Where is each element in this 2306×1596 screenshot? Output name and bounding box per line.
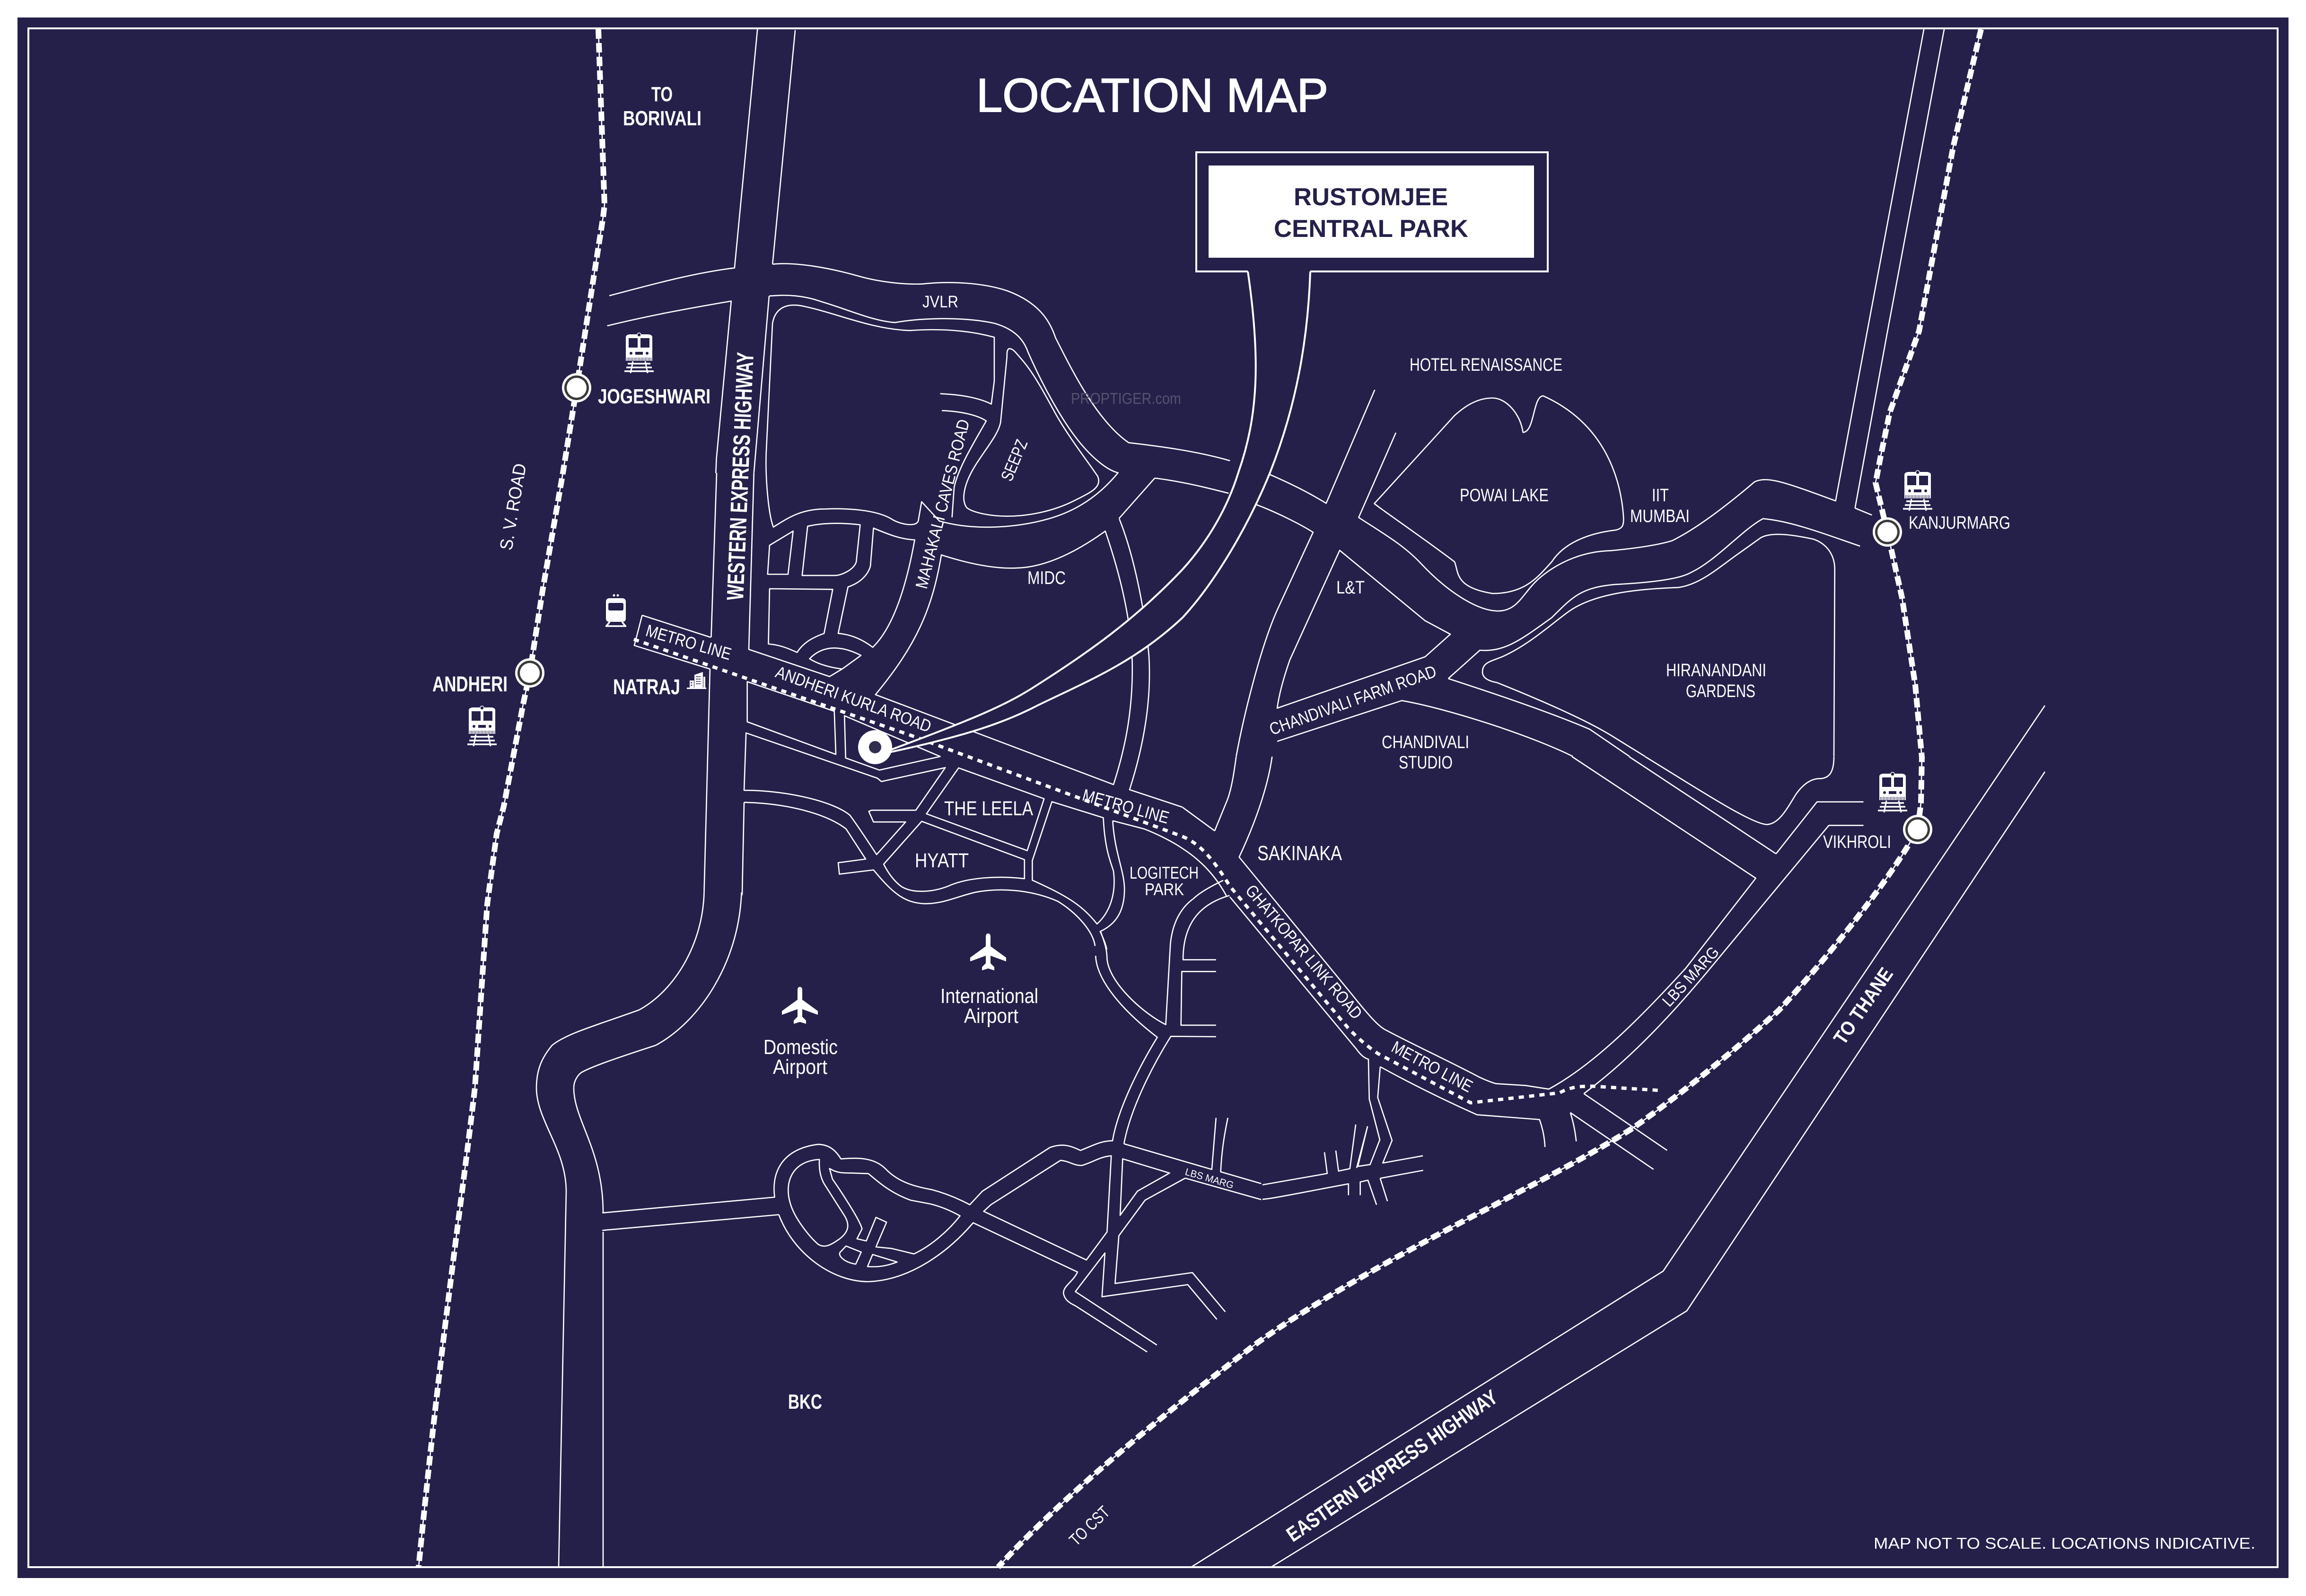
road label: S. V. Road: S. V. ROAD: [496, 462, 530, 551]
label: L&T: L&T: [1336, 578, 1365, 598]
label: Logitech Park: [1130, 863, 1199, 899]
icon: plane international airport: [970, 933, 1006, 970]
road label: Chandivali Farm Road: CHANDIVALI FARM ROAD: [1267, 662, 1439, 739]
icon: building: [687, 672, 706, 689]
road label: To CST: TO CST: [1065, 1502, 1114, 1550]
metro line dotted route: [634, 639, 1661, 1103]
label: Domestic Airport: [763, 1036, 838, 1079]
label: IIT Mumbai: MUMBAI: [1630, 506, 1690, 526]
roads: MIDC and hotels: [634, 473, 1227, 950]
label: Hiranandani Gardens: GARDENS: [1686, 681, 1755, 701]
road label: LBS Marg east: LBS MARG: [1659, 943, 1723, 1010]
station marker: Jogeshwari: [562, 373, 591, 402]
road label: LBS Marg small: LBS MARG: [1184, 1167, 1235, 1191]
label: Jogeshwari: JOGESHWARI: [598, 385, 710, 408]
label: IIT Mumbai: IIT: [1652, 486, 1669, 506]
disclaimer: MAP NOT TO SCALE. LOCATIONS INDICATIVE.: [1874, 1535, 2255, 1552]
label: Domestic Airport: Domestic: [763, 1036, 838, 1059]
road network: [536, 29, 2045, 1567]
label: International Airport: [940, 985, 1038, 1028]
label: Kanjurmarg: KANJURMARG: [1909, 513, 2010, 533]
icon: train Vikhroli: [1878, 772, 1907, 812]
road: Eastern Express Highway: [1191, 706, 2045, 1567]
label: To Borivali: BORIVALI: [623, 107, 701, 130]
road label: Andheri Kurla Road: ANDHERI KURLA ROAD: [773, 662, 934, 736]
icon: train Jogeshwari: [624, 333, 654, 373]
pointer from callout to project location: [885, 270, 1310, 753]
label: Chandivali Studio: CHANDIVALI: [1382, 733, 1469, 752]
roads: south centre branches: [1263, 1125, 1423, 1205]
icon: train Andheri: [467, 706, 497, 746]
title: LOCATION MAP: [976, 69, 1328, 122]
roads: airport loop and LBS Marg west: [602, 881, 1261, 1352]
label: Hiranandani Gardens: [1666, 661, 1766, 701]
label: JVLR: JVLR: [922, 293, 958, 311]
road label: To Thane: TO THANE: [1829, 963, 1897, 1048]
road label: Metro Line east: METRO LINE: [1388, 1037, 1476, 1096]
road label: Metro Line west: METRO LINE: [644, 620, 734, 664]
label: BKC: BKC: [788, 1390, 822, 1413]
label: Hiranandani Gardens: HIRANANDANI: [1666, 661, 1766, 680]
watermark: PROPTIGER.com: [1071, 390, 1181, 407]
station marker: Kanjurmarg: [1873, 517, 1902, 547]
road label: Western Express Highway: WESTERN EXPRESS HIGHWAY: [722, 352, 759, 601]
label: Powai Lake: POWAI LAKE: [1460, 486, 1549, 506]
label: Logitech Park: LOGITECH: [1130, 863, 1199, 882]
road label: Mahakali Caves Road: MAHAKALI CAVES ROAD: [912, 417, 973, 591]
callout: Rustomjee Central Park: RUSTOMJEE: [1294, 183, 1448, 211]
station marker: Andheri: [515, 658, 544, 688]
roads: far south west: [536, 1088, 603, 1567]
label: The Leela: THE LEELA: [944, 797, 1033, 820]
label: IIT Mumbai: [1630, 486, 1690, 526]
label: To Borivali: [623, 83, 701, 130]
road label: Eastern Express Highway: EASTERN EXPRESS HIGHWAY: [1282, 1386, 1502, 1546]
label: Hotel Renaissance: HOTEL RENAISSANCE: [1410, 355, 1562, 375]
label: SEEPZ: SEEPZ: [997, 436, 1031, 484]
icon: plane domestic airport: [782, 987, 818, 1024]
label: Natraj: NATRAJ: [613, 675, 680, 699]
roads: Powai lake and Hiranandani: [1236, 29, 1944, 757]
road label: Ghatkopar Link Road: GHATKOPAR LINK ROAD: [1242, 881, 1366, 1023]
callout: Rustomjee Central Park: CENTRAL PARK: [1274, 215, 1468, 243]
callout: Rustomjee Central Park: [1196, 152, 1548, 271]
label: To Borivali: TO: [651, 83, 673, 106]
icon: train Kanjurmarg: [1903, 471, 1932, 511]
label: Chandivali Studio: [1382, 733, 1469, 773]
label: Sakinaka: SAKINAKA: [1257, 842, 1342, 865]
label: Vikhroli: VIKHROLI: [1823, 832, 1891, 852]
roads: JVLR and SEEPZ: [754, 264, 1230, 527]
label: MIDC: MIDC: [1027, 568, 1066, 588]
railway line: western: [419, 29, 605, 1567]
railway line: central: [998, 29, 1981, 1567]
label: Andheri: ANDHERI: [432, 672, 508, 696]
roads: Western Express Highway south and link road: [536, 892, 742, 1088]
label: Hyatt: HYATT: [915, 849, 969, 872]
label: Domestic Airport: Airport: [773, 1055, 827, 1079]
label: Logitech Park: PARK: [1145, 880, 1184, 899]
icon: metro train: [605, 594, 626, 627]
label: International Airport: International: [940, 985, 1038, 1008]
roads: Sakinaka, Ghatkopar and LBS Marg east: [1183, 757, 1864, 1169]
station marker: Vikhroli: [1903, 815, 1932, 844]
road label: Metro Line centre: METRO LINE: [1080, 785, 1171, 828]
label: Chandivali Studio: STUDIO: [1399, 753, 1453, 773]
label: International Airport: Airport: [964, 1004, 1018, 1028]
project location marker: [858, 730, 892, 764]
roads: north west: [607, 29, 795, 473]
